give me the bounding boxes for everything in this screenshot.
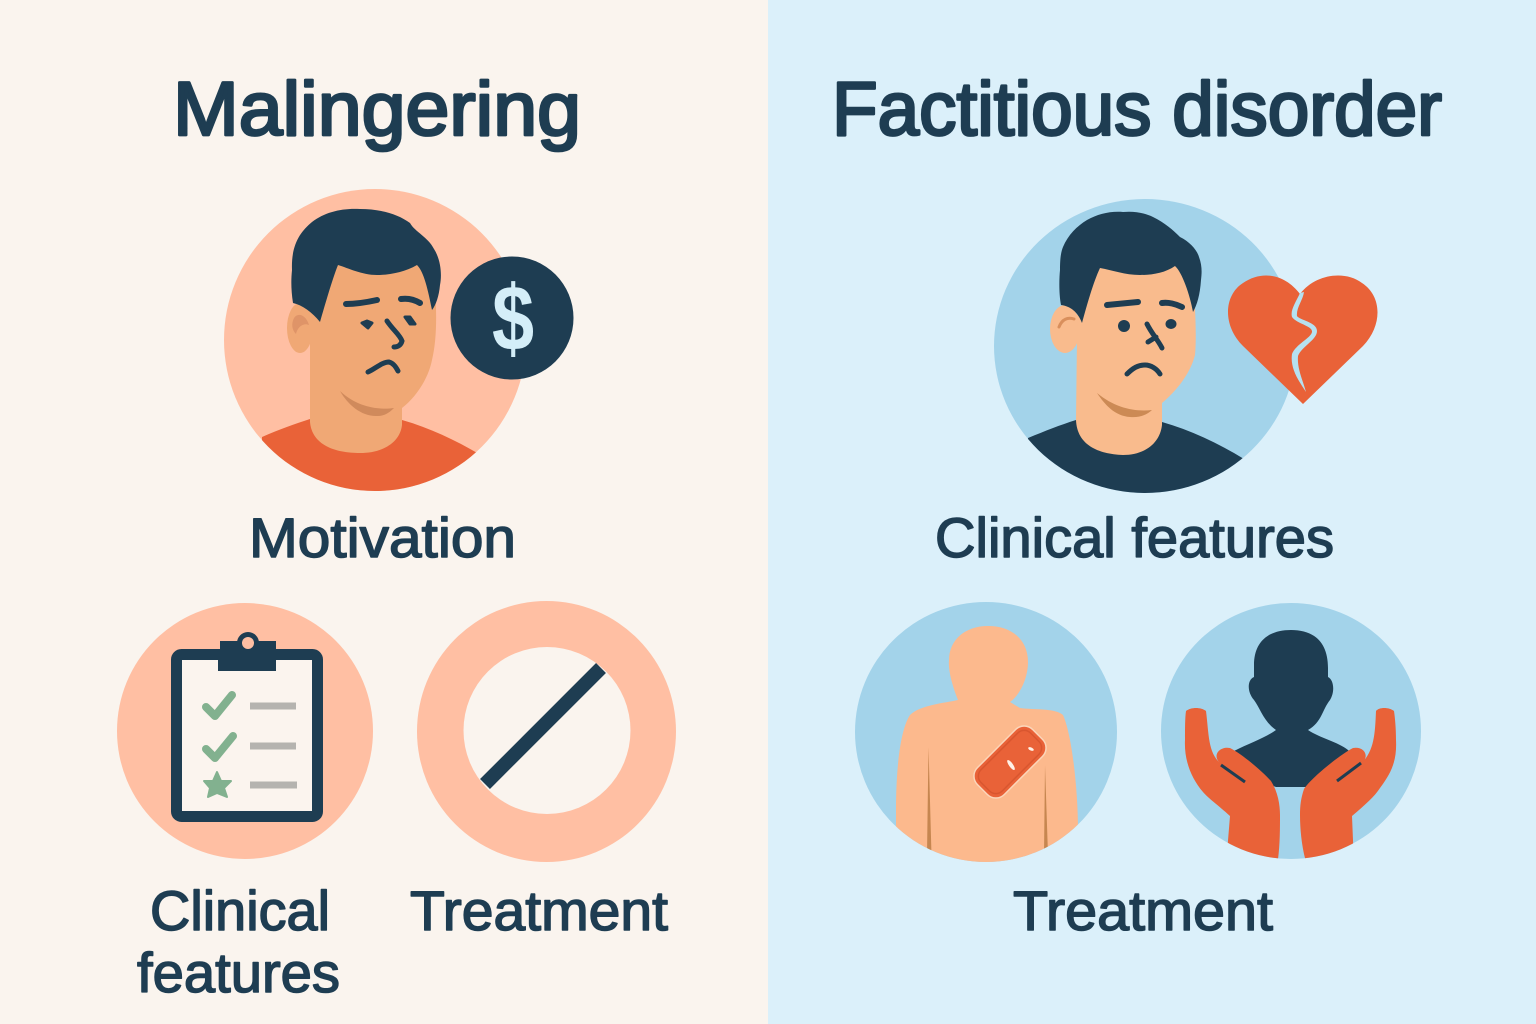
panel background: malingering xyxy=(0,0,768,1024)
label: Clinical features: Clinical xyxy=(150,879,330,942)
icon: dollar badge: $ xyxy=(492,265,534,370)
icon: clipboard checklist xyxy=(117,603,373,859)
label: Clinical features: features xyxy=(137,941,340,1004)
panel background: factitious disorder xyxy=(768,0,1536,1024)
heading: Malingering: Malingering xyxy=(173,67,581,152)
illustration: sad man xyxy=(994,199,1296,500)
icon: caring hands xyxy=(1161,603,1421,865)
panel: malingering xyxy=(117,78,676,994)
label: Clinical features xyxy=(137,879,340,1004)
label: Treatment: Treatment xyxy=(1013,879,1273,942)
icon: treatment none (crossed ring) xyxy=(417,601,676,862)
icon: broken heart xyxy=(1228,275,1378,404)
panel: factitious disorder xyxy=(768,0,1536,1024)
icon: body with bandage xyxy=(855,602,1117,870)
label: Clinical features: Clinical features xyxy=(935,506,1334,569)
icon: dollar badge xyxy=(450,256,574,380)
label: Treatment: Treatment xyxy=(410,879,668,942)
label: Motivation: Motivation xyxy=(249,506,516,569)
illustration: worried man xyxy=(224,189,526,500)
heading: Factitious disorder: Factitious disorder xyxy=(832,67,1442,152)
